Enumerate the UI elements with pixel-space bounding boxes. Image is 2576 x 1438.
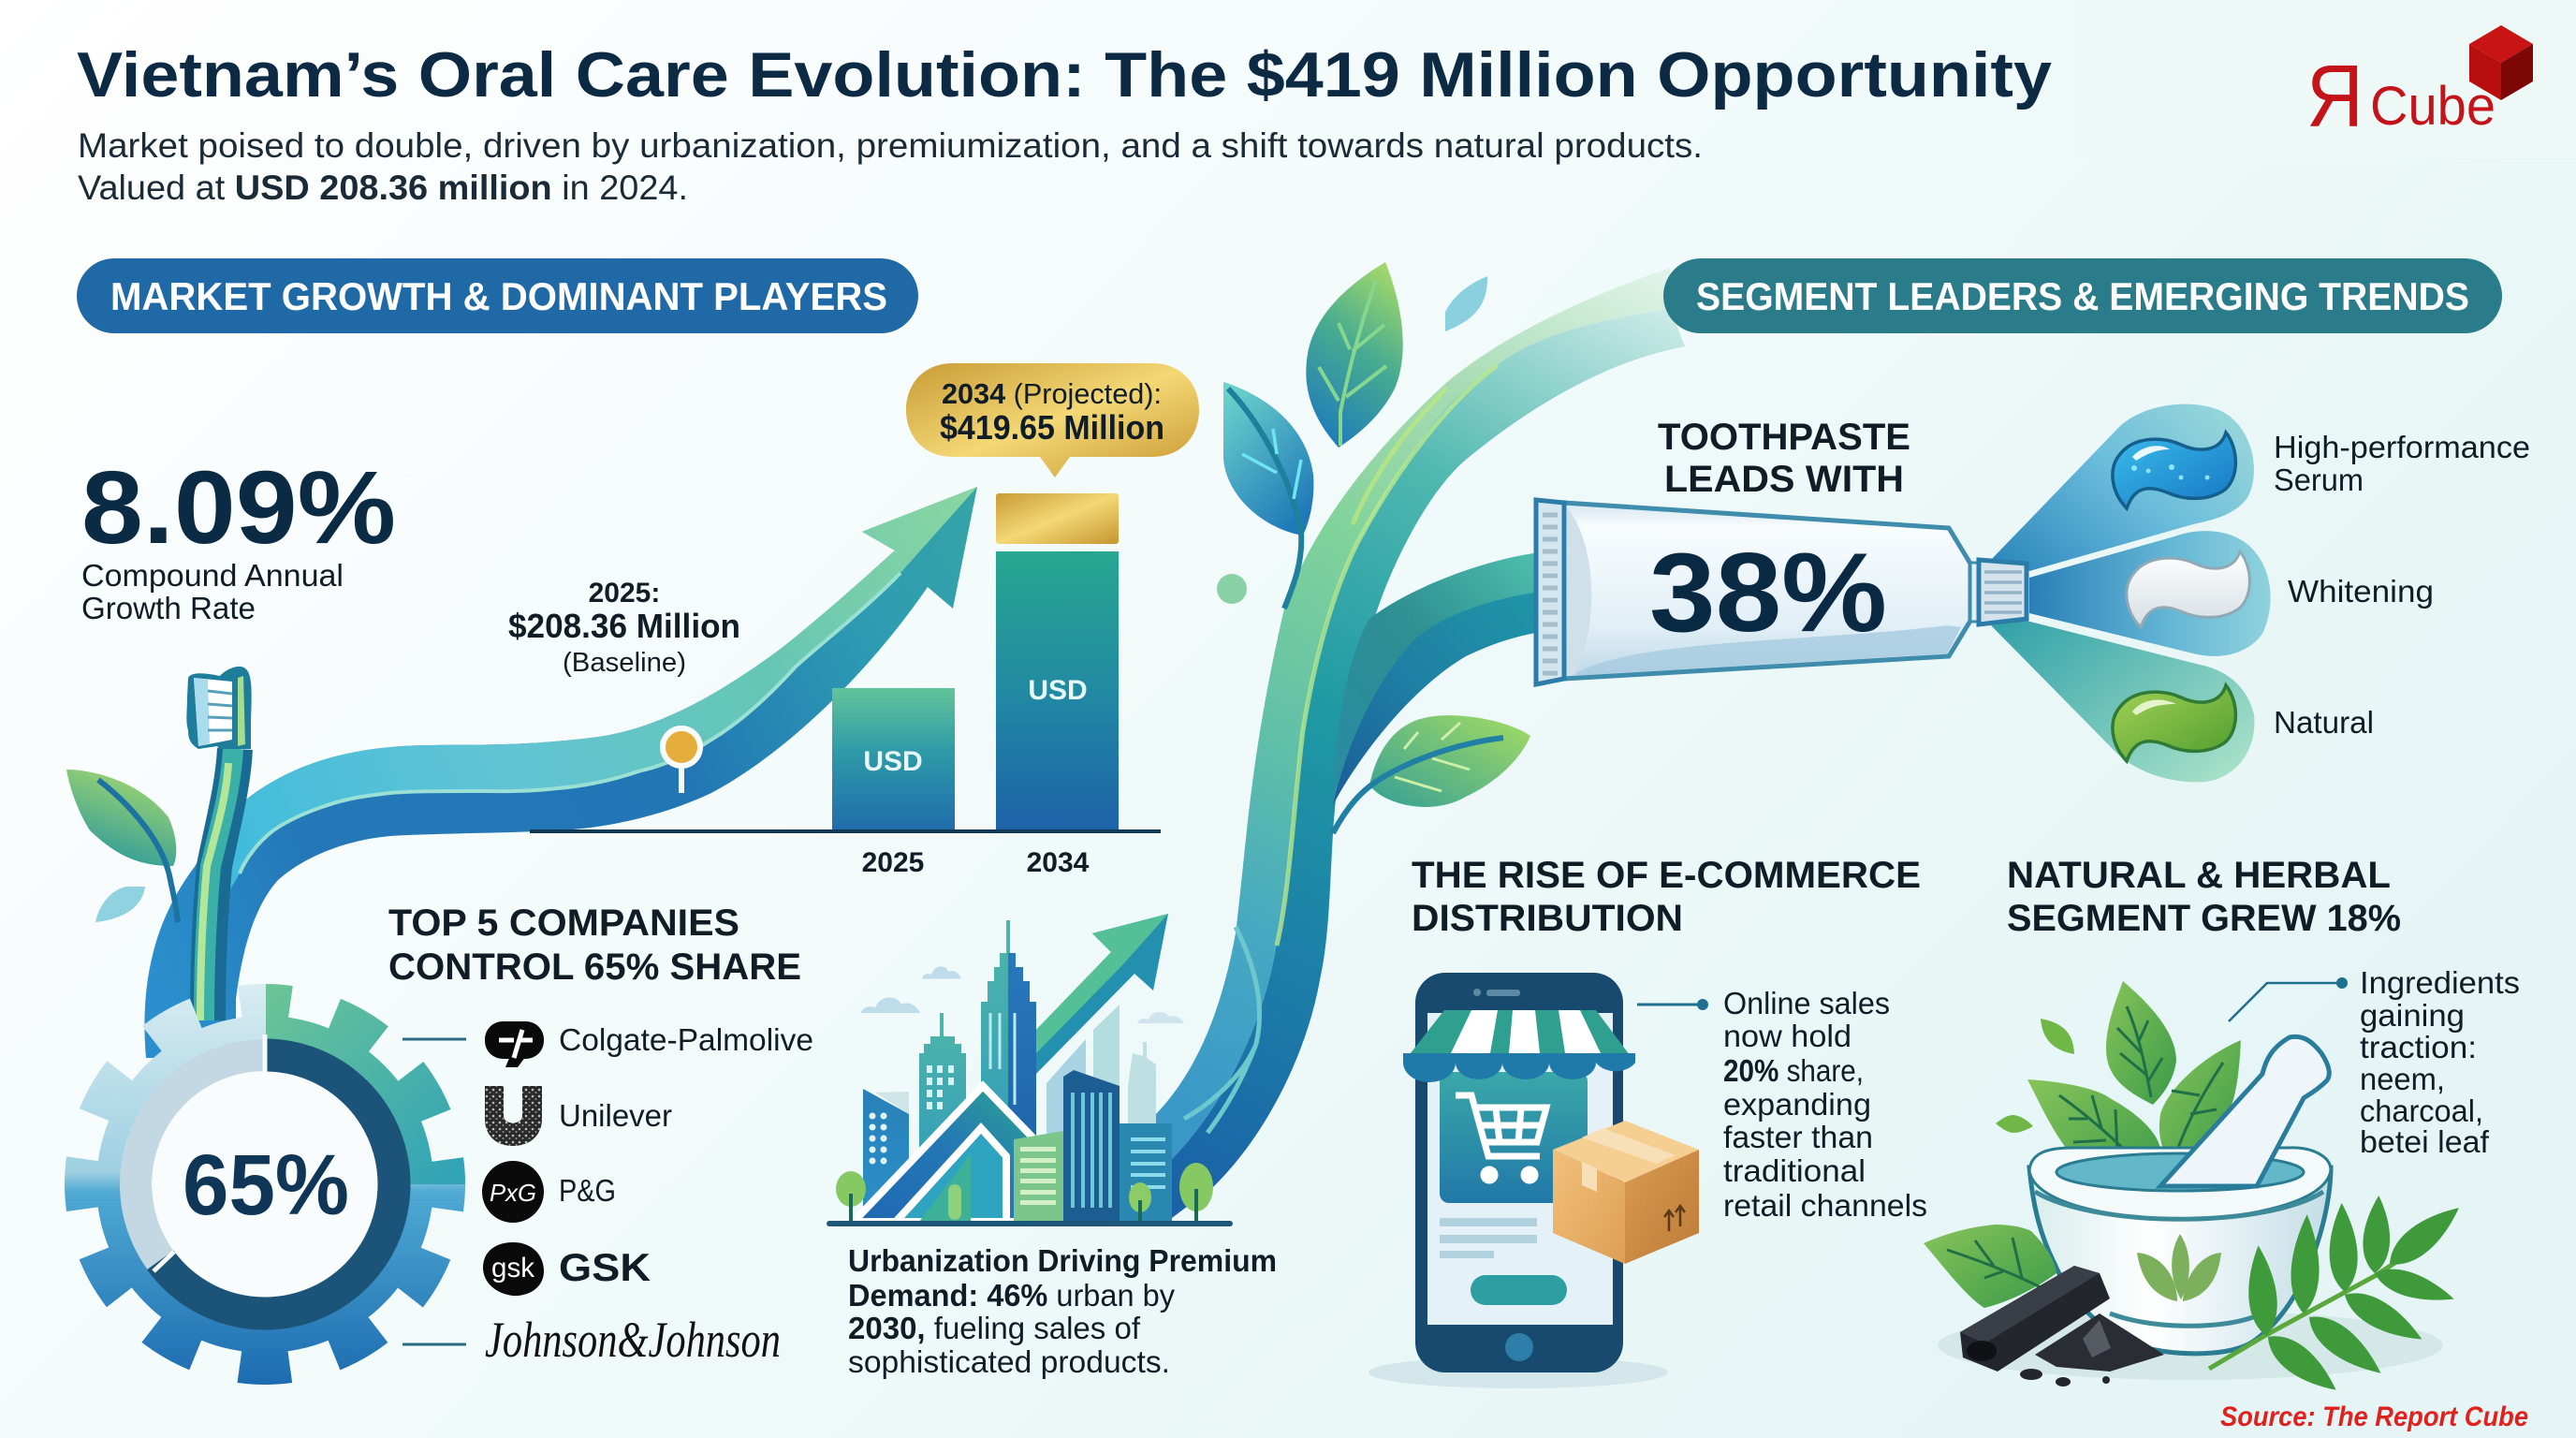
company: P&G <box>482 1161 616 1223</box>
subtitle <box>78 126 1703 207</box>
heading: e-commerce: THE RISE OF E-COMMERCE <box>1412 855 1921 896</box>
pill heading: segment leaders <box>1663 258 2502 333</box>
text: CAGR: Growth Rate <box>81 591 256 625</box>
marker pin on ribbon <box>663 728 700 793</box>
text: e-commerce body: Online sales <box>1723 986 1890 1020</box>
leaf: small drop <box>1445 276 1487 331</box>
bar 2025: USD <box>863 746 923 777</box>
icon: toothbrush <box>186 667 252 1020</box>
text: CAGR: Compound Annual <box>81 558 344 593</box>
icon: parcel box <box>1553 1121 1699 1264</box>
bowl emblem <box>2137 1234 2221 1301</box>
logo: RCube <box>2306 25 2533 145</box>
bar 2034 <box>996 493 1119 830</box>
connector: bottom company <box>402 1343 466 1346</box>
subtitle: Market poised to double, driven by urbanization, premiumization, and a shift towards natural products. <box>78 126 1703 165</box>
bar 2034: USD <box>1028 675 1088 706</box>
callout connector: e-commerce <box>1637 999 1708 1010</box>
text: 2025 baseline label: (Baseline) <box>563 648 686 678</box>
callout: 2034 projected: $419.65 Million <box>940 408 1164 447</box>
icon: gear 65% donut <box>81 1001 448 1368</box>
text: e-commerce body: traditional <box>1723 1153 1866 1188</box>
logo: RCube: R <box>2306 47 2364 145</box>
pill heading: segment leaders: SEGMENT LEADERS & EMERGING TRENDS <box>1696 274 2469 318</box>
leaf: small pale <box>95 887 145 922</box>
company: Unilever: Unilever <box>559 1098 672 1133</box>
heading: top 5 companies: TOP 5 COMPANIES <box>388 902 739 944</box>
text: herbal body: neem, <box>2360 1062 2445 1096</box>
petal: whitening <box>2029 531 2271 656</box>
callout connector: herbal <box>2229 977 2348 1021</box>
decorative dot <box>1217 574 1247 604</box>
text: CAGR <box>81 450 396 625</box>
pestle <box>2160 1036 2329 1186</box>
company: GSK <box>483 1242 651 1296</box>
neem sprig <box>2209 1195 2467 1401</box>
petal: serum <box>1991 404 2254 571</box>
text: herbal body: betei leaf <box>2360 1124 2490 1159</box>
company: Unilever <box>485 1086 672 1146</box>
chart axis <box>530 829 1161 833</box>
logo: RCube: Cube <box>2370 76 2496 137</box>
leaf: left of toothbrush <box>66 770 178 922</box>
bar chart <box>530 493 1161 878</box>
company: GSK: gsk <box>491 1253 535 1284</box>
tube percentage: 38% <box>1649 530 1887 655</box>
heading: top 5 companies <box>388 902 801 988</box>
city arrow <box>1036 914 1168 1074</box>
gear percentage: 65% <box>183 1137 349 1233</box>
callout: 2034 projected <box>906 363 1199 477</box>
heading: toothpaste: TOOTHPASTE <box>1658 417 1910 458</box>
heading: toothpaste <box>1658 417 1910 500</box>
growth ribbon with arrow <box>144 487 977 1058</box>
dark building <box>1063 1070 1120 1222</box>
labels: segments: High-performance <box>2274 430 2530 464</box>
source: Source: The Report Cube <box>2220 1401 2528 1432</box>
logo backdrop panel <box>2076 0 2576 158</box>
title: Vietnam’s Oral Care Evolution: The $419 Million Opportunity <box>77 39 2052 110</box>
text: e-commerce body: now hold <box>1723 1019 1852 1053</box>
vine branch to toothpaste tube <box>1333 552 1540 805</box>
heading: natural and herbal <box>2007 855 2401 939</box>
axis label 2025: 2025 <box>862 847 924 878</box>
text: herbal body <box>2360 965 2520 1159</box>
text: 2025 baseline label: $208.36 Million <box>508 607 740 645</box>
text: e-commerce body <box>1723 986 1927 1223</box>
company: Colgate-Palmolive: Colgate-Palmolive <box>559 1022 813 1057</box>
pill heading: market growth: MARKET GROWTH & DOMINANT PLAYERS <box>110 274 887 318</box>
main vine ribbon <box>1147 268 1685 1226</box>
axis label 2034: 2034 <box>1027 847 1090 878</box>
toothpaste tube <box>1536 500 2027 684</box>
text: herbal body: Ingredients <box>2360 965 2520 1000</box>
company: P&G: PxG <box>490 1179 536 1207</box>
text: herbal body: charcoal, <box>2360 1093 2483 1128</box>
leaf: lower right of vine <box>1333 715 1530 833</box>
text: CAGR: 8.09% <box>81 450 396 565</box>
labels: segments: Natural <box>2274 705 2374 740</box>
text: herbal body: gaining <box>2360 998 2465 1033</box>
icon: smartphone storefront <box>1368 973 1699 1388</box>
text: urbanization: Urbanization Driving Premium <box>848 1243 1277 1278</box>
illustration: mortar with herbs <box>1924 981 2467 1401</box>
heading: natural and herbal: SEGMENT GREW 18% <box>2007 898 2401 939</box>
text: e-commerce body: 20% share, <box>1723 1053 1864 1088</box>
right building <box>1120 1123 1172 1222</box>
labels: segments: Whitening <box>2288 574 2434 609</box>
charcoal <box>1960 1266 2164 1387</box>
chevron roof <box>854 1086 1039 1222</box>
heading: toothpaste: LEADS WITH <box>1664 459 1904 500</box>
petal: natural <box>1991 621 2254 782</box>
icon: shopping cart <box>1456 1095 1546 1181</box>
text: e-commerce body: faster than <box>1723 1120 1873 1154</box>
connector: top company <box>402 1037 466 1041</box>
leaf: lower left <box>1924 1225 2056 1308</box>
subtitle: Valued at USD 208.36 million in 2024. <box>78 169 688 207</box>
text: e-commerce body: retail channels <box>1723 1188 1927 1223</box>
company: Colgate-Palmolive <box>485 1021 813 1067</box>
heading: e-commerce: DISTRIBUTION <box>1412 898 1683 939</box>
text: 2025 baseline label: 2025: <box>589 578 660 609</box>
text: urbanization: sophisticated products. <box>848 1344 1170 1379</box>
text: e-commerce body: expanding <box>1723 1087 1871 1122</box>
icon: serum paste swirl <box>2113 433 2235 508</box>
pill heading: market growth <box>77 258 918 333</box>
icon: green paste swirl <box>2113 685 2235 761</box>
mortar bowl <box>2029 1036 2331 1354</box>
awning <box>1403 1010 1635 1082</box>
labels: segments: Serum <box>2274 462 2364 497</box>
text: urbanization <box>848 1243 1277 1379</box>
text: herbal body: traction: <box>2360 1030 2477 1064</box>
text: urbanization: Demand: 46% urban by <box>848 1278 1175 1313</box>
heading: e-commerce <box>1412 855 1921 939</box>
green building <box>1014 1131 1063 1222</box>
bar 2025 <box>832 688 955 830</box>
callout: 2034 projected: 2034 (Projected): <box>942 377 1162 410</box>
labels: segments <box>2274 430 2530 740</box>
leaf: second left <box>1223 382 1313 609</box>
company: P&G: P&G <box>559 1173 616 1208</box>
heading: natural and herbal: NATURAL & HERBAL <box>2007 855 2391 896</box>
herb leaves <box>1996 981 2241 1186</box>
text: urbanization: 2030, fueling sales of <box>848 1311 1141 1345</box>
company: Johnson & Johnson: Johnson&Johnson <box>485 1312 781 1368</box>
leaf: large top <box>1306 262 1403 448</box>
text: 2025 baseline label <box>508 578 740 678</box>
illustration: city skyline with arrow <box>827 914 1233 1226</box>
icon: white paste swirl <box>2127 551 2249 627</box>
company: GSK: GSK <box>559 1245 651 1289</box>
heading: top 5 companies: CONTROL 65% SHARE <box>388 946 801 988</box>
